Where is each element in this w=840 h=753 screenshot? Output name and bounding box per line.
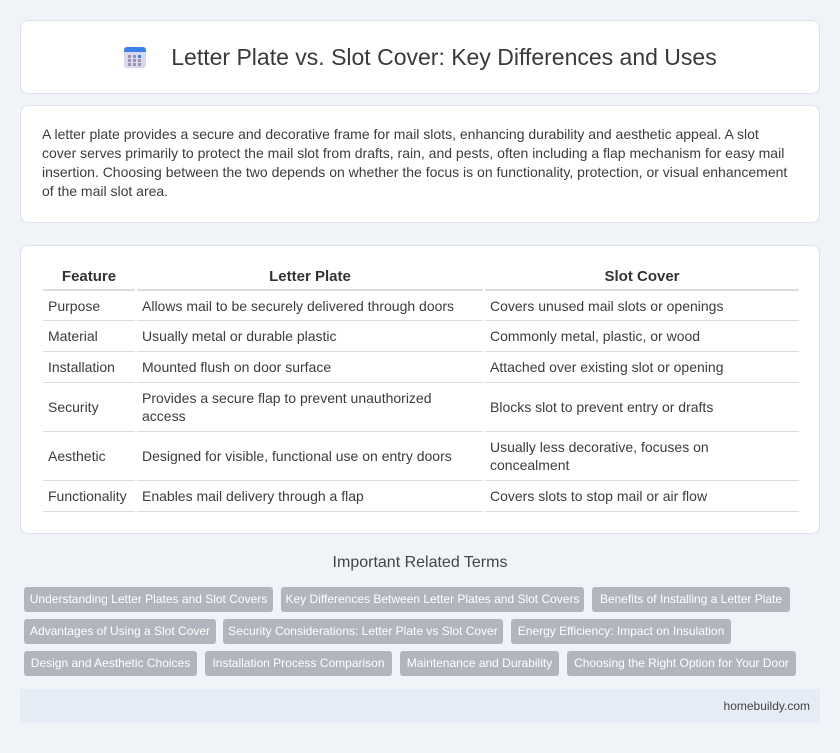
title: Letter Plate vs. Slot Cover: Key Differences and Uses [171, 44, 717, 70]
comparison table: Letter Plate [269, 268, 351, 285]
comparison table: Enables mail delivery through a flap [142, 488, 364, 504]
comparison table: Covers slots to stop mail or air flow [490, 488, 707, 504]
intro text [20, 105, 820, 223]
text: Energy Efficiency: Impact on Insulation [518, 624, 724, 638]
comparison table: Usually less decorative, focuses on concealment [490, 439, 709, 473]
comparison table: Blocks slot to prevent entry or drafts [490, 399, 713, 415]
comparison table: Feature [62, 268, 116, 285]
title [20, 20, 820, 94]
text: Advantages of Using a Slot Cover [30, 624, 210, 638]
related terms heading: Important Related Terms [333, 554, 507, 571]
comparison table: Installation [48, 359, 115, 375]
text: Key Differences Between Letter Plates and Slot Covers [286, 592, 579, 606]
comparison table: Mounted flush on door surface [142, 359, 331, 375]
tags [24, 587, 796, 676]
comparison table: Attached over existing slot or opening [490, 359, 723, 375]
comparison table: Provides a secure flap to prevent unauthorized access [142, 390, 432, 424]
comparison table: Aesthetic [48, 448, 106, 464]
comparison table: Allows mail to be securely delivered through doors [142, 298, 454, 314]
comparison table: Functionality [48, 488, 127, 504]
comparison table: Covers unused mail slots or openings [490, 298, 723, 314]
comparison table: Material [48, 328, 98, 344]
comparison table [20, 245, 820, 534]
icon: calendar [124, 47, 146, 68]
text: Choosing the Right Option for Your Door [574, 656, 789, 670]
comparison table: Security [48, 399, 99, 415]
text: Maintenance and Durability [407, 656, 552, 670]
comparison table: Commonly metal, plastic, or wood [490, 328, 700, 344]
text: Installation Process Comparison [212, 656, 385, 670]
comparison table: Slot Cover [604, 268, 680, 285]
text: Benefits of Installing a Letter Plate [600, 592, 782, 606]
intro text: A letter plate provides a secure and decorative frame for mail slots, enhancing durability and aesthetic appeal. A slot cover serves primarily to protect the mail slot from drafts, rain, and pests, often including a flap mechanism for easy mail insertion. Choosing between the two depends on whether the focus is on functionality, protection, or visual enhancement of the mail slot area. [42, 126, 787, 199]
text: Design and Aesthetic Choices [31, 656, 190, 670]
text: Security Considerations: Letter Plate vs Slot Cover [228, 624, 498, 638]
comparison table: Purpose [48, 298, 100, 314]
comparison table: Designed for visible, functional use on entry doors [142, 448, 452, 464]
footer: homebuildy.com [724, 699, 810, 713]
footer [20, 689, 820, 723]
text: Understanding Letter Plates and Slot Covers [30, 592, 267, 606]
comparison table: Usually metal or durable plastic [142, 328, 337, 344]
